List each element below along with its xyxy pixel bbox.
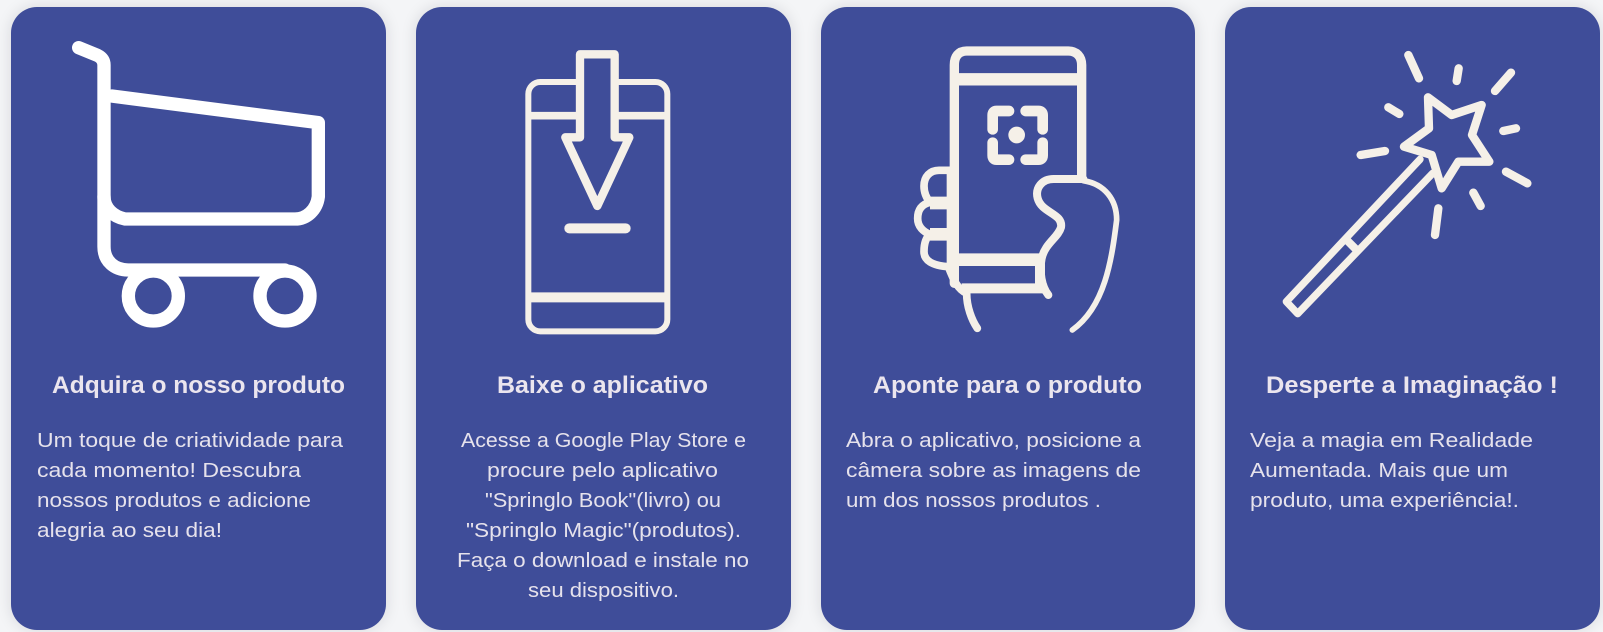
text block: step 1 description: alegria ao seu dia!: [37, 519, 222, 542]
text block: step 4 description: [1250, 429, 1533, 512]
icon: phone with download arrow: [528, 54, 667, 331]
icon: magic wand with star: [1286, 55, 1527, 314]
text block: step 3 description: [846, 429, 1142, 512]
text block: step 2 description: Faça o download e instale no: [457, 549, 749, 572]
heading: step 1: Adquira o nosso produto: [52, 372, 345, 399]
icon: hand holding phone scanning: [918, 51, 1117, 330]
text block: step 4 description: Veja a magia em Realidade: [1250, 429, 1533, 452]
text block: step 1 description: nossos produtos e adicione: [37, 489, 311, 512]
text block: step 2 description: [457, 429, 749, 602]
text block: step 3 description: câmera sobre as imagens de: [846, 459, 1141, 482]
heading: step 4: Desperte a Imaginação !: [1266, 372, 1558, 399]
text block: step 2 description: Acesse a Google Play Store e: [461, 429, 746, 452]
text block: step 3 description: Abra o aplicativo, posicione a: [846, 429, 1142, 452]
text block: step 1 description: cada momento! Descubra: [37, 459, 302, 482]
text block: step 4 description: produto, uma experiência!.: [1250, 489, 1519, 512]
panel: step 1 buy product: [11, 7, 386, 630]
heading: step 2: Baixe o aplicativo: [497, 372, 708, 399]
text block: step 3 description: um dos nossos produtos .: [846, 489, 1101, 512]
panel: step 4 spark imagination: [1225, 7, 1600, 630]
panel: step 3 point at product: [821, 7, 1195, 630]
text block: step 1 description: Um toque de criatividade para: [37, 429, 344, 452]
text block: step 2 description: "Springlo Book"(livro) ou: [485, 489, 721, 512]
text block: step 2 description: seu dispositivo.: [528, 579, 679, 602]
text block: step 2 description: "Springlo Magic"(produtos).: [466, 519, 741, 542]
text block: step 1 description: [37, 429, 344, 542]
text block: step 2 description: procure pelo aplicativo: [487, 459, 718, 482]
panel: step 2 download app: [416, 7, 791, 630]
icon: shopping cart: [79, 48, 318, 321]
text block: step 4 description: Aumentada. Mais que um: [1250, 459, 1508, 482]
heading: step 3: Aponte para o produto: [873, 372, 1142, 399]
